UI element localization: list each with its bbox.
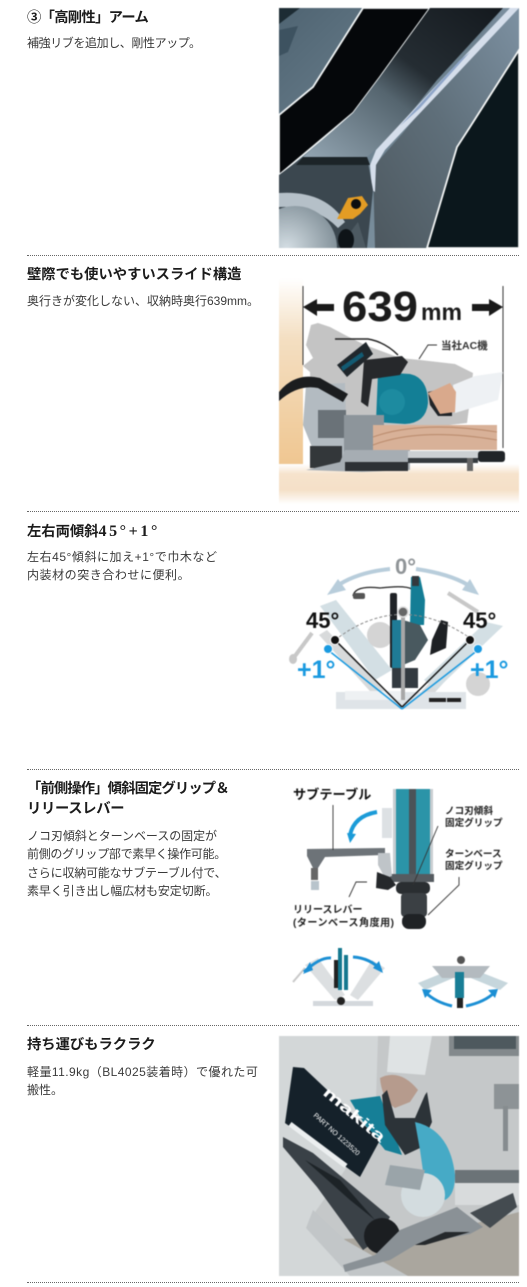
base: [336, 692, 466, 709]
carriage: [344, 415, 384, 455]
saw machine: [279, 339, 505, 472]
text labels: (ターンベース角度用): [293, 916, 394, 929]
D handle: [361, 356, 408, 407]
heading: front-side operation: 「前側操作」傾斜固定グリップ＆: [27, 781, 229, 797]
rear handle: [428, 388, 452, 416]
photo: carrying the saw: [278, 1035, 520, 1276]
angle labels: [297, 554, 509, 684]
leader lines: [333, 805, 459, 915]
blue motor: [350, 1096, 402, 1155]
turn base body: [343, 1207, 483, 1272]
sub table arm: [307, 808, 392, 890]
heading: front-side operation: リリースレバー: [27, 801, 124, 817]
curved blue arrow: [347, 812, 377, 843]
text labels: 固定グリップ: [445, 860, 503, 872]
callout: our AC machine: 当社AC機: [441, 339, 488, 352]
illustration: bevel angles: [288, 554, 509, 710]
illustration: 639mm depth comparison: [278, 283, 520, 502]
ground: [344, 1212, 520, 1276]
silver column: [303, 383, 347, 462]
rails: [408, 451, 493, 459]
text: front-side operation description: ノコ刃傾斜とターンベースの固定が: [27, 829, 217, 843]
release lever: [376, 872, 396, 890]
arrow right: [472, 299, 503, 316]
bag text: makita: [319, 1084, 389, 1147]
side fixture: [494, 1084, 519, 1109]
wall base: [455, 1170, 519, 1183]
grip knob: [396, 882, 430, 929]
heading: front-side operation: [27, 780, 229, 817]
motor dark: [364, 1218, 400, 1254]
text labels: ノコ刃傾斜: [445, 805, 493, 817]
heading: high rigidity arm: ③「高剛性」アーム: [27, 10, 148, 26]
text labels: ターンベース: [445, 848, 502, 860]
angle lines and arc: [324, 607, 482, 709]
window: [449, 1036, 519, 1056]
heading: easy carrying: 持ち運びもラクラク: [27, 1037, 156, 1053]
sleeve: [453, 372, 503, 413]
center saw: [353, 576, 448, 688]
text: bevel description: [27, 550, 218, 582]
white rod: [290, 1124, 346, 1166]
blue arc arrows: [327, 569, 479, 595]
text: front-side operation description: さらに収納可能なサブテーブル付で、: [27, 866, 226, 880]
angle labels: +1°: [470, 656, 509, 684]
hand: [428, 383, 456, 414]
text: bevel description: 左右45°傾斜に加え+1°で巾木など: [27, 550, 218, 564]
blue saw body: [376, 372, 428, 424]
wood block: [373, 425, 497, 450]
angle labels: 0°: [395, 554, 416, 579]
heading: slide structure: 壁際でも使いやすいスライド構造: [27, 267, 241, 283]
base plate: [283, 1137, 390, 1250]
angle labels: 45°: [306, 608, 339, 633]
black bag: [285, 1067, 380, 1177]
motor base: [310, 446, 342, 468]
text labels: リリースレバー: [293, 904, 362, 916]
text: easy carrying description: 軽量11.9kg（BL4025装着時）で優れた可: [27, 1065, 258, 1079]
photo: arm close-up: [278, 7, 520, 249]
wall and floor: [279, 278, 303, 478]
power cord: [335, 339, 398, 355]
angle labels: 45°: [463, 608, 496, 633]
battery: [337, 342, 373, 377]
text: front-side operation description: 前側のグリップ部で素早く操作可能。: [27, 847, 226, 861]
text: front-side operation description: 素早く引き出し幅広材も安定切断。: [27, 884, 217, 898]
639 mm label: mm: [421, 299, 462, 325]
mini illustration: bevel: [293, 948, 385, 1006]
hand: [380, 1075, 418, 1108]
callout: our AC machine: [419, 339, 488, 359]
heading: bevel 45 plus 1: 左右両傾斜45°+1°: [27, 523, 160, 540]
grey AC machine silhouette: [303, 323, 473, 430]
dust hose: [279, 377, 348, 402]
person torso and legs: [279, 1036, 378, 1276]
text: slide structure description: 奥行きが変化しない、収納時奥行639mm。: [27, 294, 259, 308]
text labels: サブテーブル: [293, 786, 371, 802]
639 mm label: [342, 283, 462, 331]
text labels: [293, 786, 503, 929]
illustration: sub table and grips: [292, 786, 508, 1009]
text: easy carrying description: [27, 1065, 258, 1097]
angle labels: +1°: [297, 656, 336, 684]
639 mm label: 639: [342, 283, 418, 331]
arrow left: [303, 299, 334, 316]
text labels: 固定グリップ: [445, 817, 503, 829]
bag text: PART NO 1223520: [312, 1112, 361, 1157]
ghost saws: [289, 593, 503, 700]
text: high rigidity arm description: 補強リブを追加し、剛性アップ。: [27, 36, 201, 50]
text: easy carrying description: 搬性。: [27, 1083, 63, 1097]
bag text: [312, 1089, 384, 1156]
text: bevel description: 内装材の突き合わせに便利。: [27, 568, 190, 582]
mini illustration: turn base: [418, 956, 508, 1008]
blade: [415, 1122, 455, 1200]
person sleeve: [387, 1036, 432, 1075]
blue rail: [390, 789, 434, 882]
text: front-side operation description: [27, 829, 226, 898]
handle: [382, 1090, 432, 1155]
